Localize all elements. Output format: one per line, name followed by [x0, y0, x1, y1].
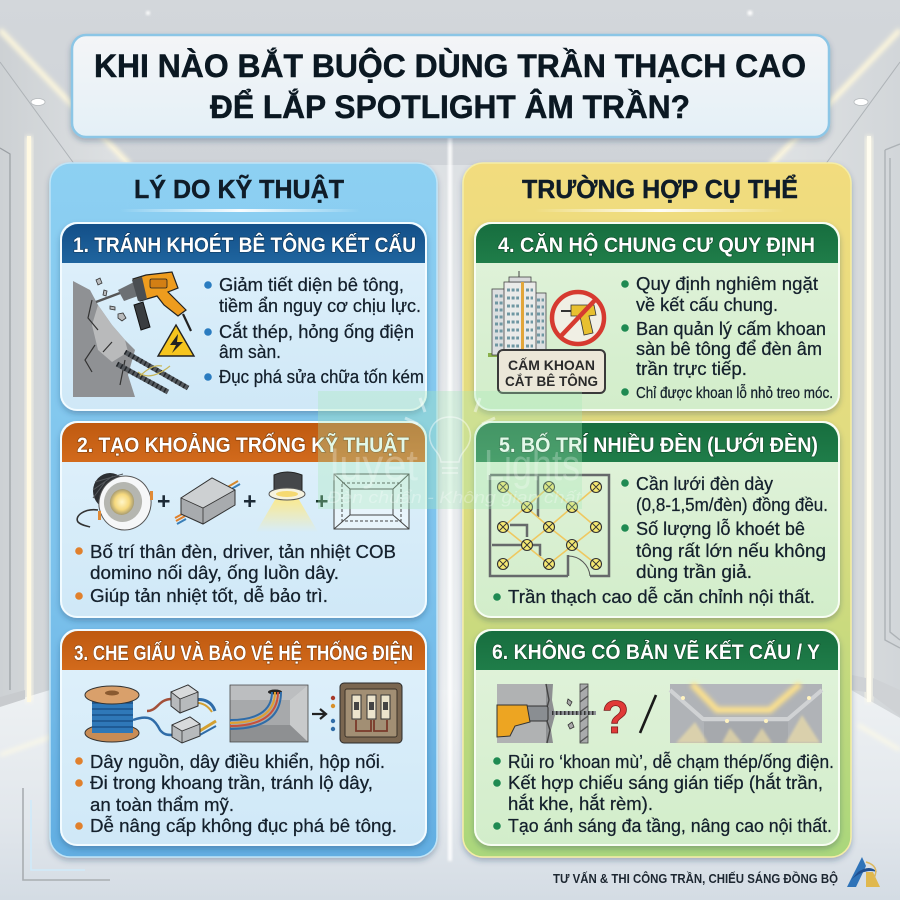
card 4 bullets: về kết cấu chung.	[636, 295, 778, 315]
icon: logo	[847, 857, 880, 887]
card 1 bullets	[204, 275, 424, 387]
card 1 bullets: Cắt thép, hỏng ống điện	[219, 321, 414, 342]
card 5 bullets: dùng trần giả.	[636, 562, 752, 582]
watermark: Đèn chuẩn - Không gian chất	[327, 488, 582, 507]
icon: light grid floor plan	[490, 475, 609, 576]
card 5 header: 5. BỐ TRÍ NHIỀU ĐÈN (LƯỚI ĐÈN)	[499, 433, 818, 457]
icon: LED driver	[175, 478, 240, 524]
card 4 header: 4. CĂN HỘ CHUNG CƯ QUY ĐỊNH	[498, 233, 815, 257]
card 4 bullets: Ban quản lý cấm khoan	[636, 319, 826, 339]
card 2 bullets: Giúp tản nhiệt tốt, dễ bảo trì.	[90, 585, 328, 606]
card 5	[475, 422, 839, 617]
card 5 bullets: tông rất lớn nếu không	[636, 541, 826, 561]
card 3 bullets: Đi trong khoang trần, tránh lộ dây,	[90, 773, 373, 793]
card 5 bullets: Số lượng lỗ khoét bê	[636, 518, 805, 539]
card 3 header: 3. CHE GIẤU VÀ BẢO VỆ HỆ THỐNG ĐIỆN	[74, 641, 413, 665]
icon: plus: +	[315, 488, 328, 514]
icon: blind drilling	[497, 684, 596, 743]
card 6 bullets: hắt khe, hắt rèm).	[508, 793, 653, 814]
card 5 bullets: (0,8-1,5m/đèn) đồng đều.	[636, 495, 828, 515]
footer tagline: TƯ VẤN & THI CÔNG TRẦN, CHIẾU SÁNG ĐỒNG BỘ	[553, 871, 838, 886]
card 1 header	[62, 224, 425, 263]
icon: indirect ceiling lighting	[670, 684, 822, 743]
card 1 bullets: Giảm tiết diện bê tông,	[219, 275, 404, 295]
watermark: Lights	[484, 441, 580, 490]
icon: arrow	[312, 709, 326, 719]
card 6 bullets: Tạo ánh sáng đa tầng, nâng cao nội thất.	[508, 816, 832, 836]
card 2 bullets: domino nối dây, ống luồn dây.	[90, 563, 339, 583]
card 4 bullets	[621, 274, 833, 402]
card 1 bullets: tiềm ẩn nguy cơ chịu lực.	[219, 296, 421, 316]
sign: no drilling: CẤM KHOAN	[508, 357, 595, 373]
icon: apartment building	[488, 271, 546, 357]
card 5 bullets: Trần thạch cao dễ căn chỉnh nội thất.	[508, 586, 815, 607]
icon: ceiling channel with cables	[230, 685, 308, 742]
icon: plus: +	[243, 488, 256, 514]
card 4 bullets: Chỉ được khoan lỗ nhỏ treo móc.	[636, 383, 833, 402]
icon: electrical panel	[331, 683, 402, 743]
sign: no drilling	[498, 350, 605, 393]
panel: specific cases	[463, 163, 851, 857]
title text	[94, 48, 806, 125]
card 3 bullets: Dễ nâng cấp không đục phá bê tông.	[90, 815, 397, 836]
card 6	[475, 630, 839, 845]
card 1 bullets: âm sàn.	[219, 342, 281, 362]
card 5 bullets: Cần lưới đèn dày	[636, 474, 773, 494]
title text: ĐỂ LẮP SPOTLIGHT ÂM TRẦN?	[210, 89, 690, 125]
card 2 header: 2. TẠO KHOẢNG TRỐNG KỸ THUẬT	[77, 433, 409, 457]
card 4 bullets: Quy định nghiêm ngặt	[636, 274, 818, 294]
card 5 header	[476, 423, 838, 462]
card 6 header: 6. KHÔNG CÓ BẢN VẼ KẾT CẤU / Y	[492, 640, 820, 664]
icon: question mark: ?	[602, 691, 629, 743]
sign: no drilling: CẮT BÊ TÔNG	[505, 372, 598, 389]
card 1 header: 1. TRÁNH KHOÉT BÊ TÔNG KẾT CẤU	[73, 233, 416, 257]
icon: spotlight with beam	[256, 472, 318, 532]
panel: technical reasons	[50, 163, 437, 857]
panel heading: technical reasons: LÝ DO KỸ THUẬT	[134, 174, 344, 204]
card 6 bullets	[493, 751, 834, 836]
card 4 header	[476, 224, 838, 263]
card 6 bullets: Rủi ro ‘khoan mù’, dễ chạm thép/ống điện.	[508, 751, 834, 772]
card 3 bullets	[75, 752, 397, 836]
icon: plus: +	[157, 488, 170, 514]
title text: KHI NÀO BẮT BUỘC DÙNG TRẦN THẠCH CAO	[94, 48, 806, 84]
card 4 bullets: trần trực tiếp.	[636, 359, 747, 379]
icon: wire spool and junction boxes	[85, 685, 216, 743]
card 2 bullets	[75, 542, 396, 606]
card 1	[61, 223, 426, 410]
card 2	[61, 422, 426, 617]
watermark	[318, 391, 582, 509]
panel heading: specific cases: TRƯỜNG HỢP CỤ THỂ	[522, 174, 798, 204]
card 1 bullets: Đục phá sửa chữa tốn kém	[219, 367, 424, 387]
card 6 bullets: Kết hợp chiếu sáng gián tiếp (hắt trần,	[508, 772, 823, 793]
card 3 header	[62, 631, 425, 670]
icon: drill breaking concrete	[73, 272, 194, 397]
card 2 bullets: Bố trí thân đèn, driver, tản nhiệt COB	[90, 542, 396, 562]
card 3	[61, 630, 426, 845]
icon: downlight	[77, 470, 157, 536]
card 3 bullets: an toàn thẩm mỹ.	[90, 795, 234, 815]
card 3 bullets: Dây nguồn, dây điều khiển, hộp nối.	[90, 752, 385, 772]
title banner	[72, 35, 829, 137]
card 4 bullets: sàn bê tông để đèn âm	[636, 339, 822, 359]
icon: no drilling sign	[552, 292, 604, 344]
card 5 bullets	[493, 474, 828, 607]
watermark: luyet	[330, 441, 418, 490]
icon: slash	[640, 695, 656, 733]
icon: ceiling plan	[334, 474, 409, 529]
card 4	[475, 223, 839, 410]
card 2 header	[62, 423, 425, 462]
card 6 header	[476, 631, 838, 670]
